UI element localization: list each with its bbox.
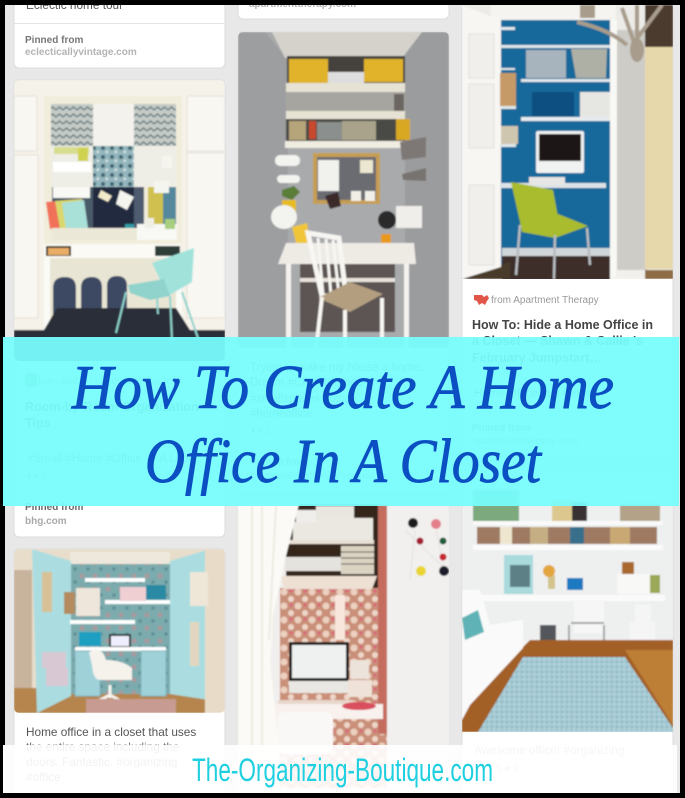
pin description: Trying to make my house a home: xyxy=(250,362,423,374)
panel: column 2 top card stub xyxy=(238,0,449,19)
pin description line 3: doors. Fantastic. #organizing xyxy=(26,755,177,769)
pin heading line 2: a Closet — Shawn & Callie 's xyxy=(472,334,643,348)
pin stats: ♦ ♦ 1 xyxy=(27,470,46,480)
panel: column 2 pink closet card xyxy=(238,504,449,794)
source icon xyxy=(474,295,489,305)
pin note: Home Office in a Closet xyxy=(474,388,596,400)
pin source: bhg.com xyxy=(25,516,67,527)
title line 1: How To Create A Home xyxy=(71,354,614,422)
pin description: Awesome office! #organizing xyxy=(474,743,624,757)
footer band with website xyxy=(3,745,677,793)
pin heading line 3: February Jumpstart… xyxy=(472,351,602,365)
panel: column 1 organization card xyxy=(14,80,225,537)
pinned from label: Pinned from xyxy=(25,35,83,46)
photo: turquoise closet with open doors xyxy=(14,549,225,713)
source line: from Better Homes and Gardens xyxy=(38,376,183,387)
panel: column 3 blue closet card xyxy=(462,5,674,364)
photo: blue closet with green chair xyxy=(462,5,673,280)
pin heading: How To: Hide a Home Office in xyxy=(472,318,653,332)
pinned from label: Pinned from xyxy=(25,502,83,513)
panel: column 2 grey closet card xyxy=(238,32,450,337)
photo: pink wallpaper closet with curtain xyxy=(238,504,449,794)
pin description line 3: #smallspaces #office xyxy=(250,393,357,405)
pin description line 2: Dream #Closet-turned- xyxy=(250,377,367,389)
pin tags: #Small #Home #Office — A Look xyxy=(27,453,195,465)
pin stats: 5 ♥ 9 xyxy=(496,764,519,775)
source line: from Apartment Therapy xyxy=(491,295,599,306)
pin description line 4: #office xyxy=(26,770,61,784)
pin heading: Room-by-Room Organization xyxy=(25,400,199,414)
pin description line 2: the entire space including the xyxy=(26,740,180,754)
pin description line 4: #homeoffice xyxy=(250,408,312,420)
title line 2: Office In A Closet xyxy=(145,428,543,496)
source icon xyxy=(25,373,37,387)
panel: column 1 top pin card xyxy=(14,0,225,68)
pin description: Home office in a closet that uses xyxy=(26,725,196,739)
pin source: homemakerdiary.blogspot.in xyxy=(250,471,386,482)
pin source: eclecticallyvintage.com xyxy=(25,47,137,58)
photo: white closet office with teal chair xyxy=(14,80,225,365)
panel: column 1 bottom closet card xyxy=(14,549,225,798)
pinned from label: Pinned from xyxy=(250,457,308,468)
panel: column 3 white office card xyxy=(462,502,674,745)
pin heading second line: Tips xyxy=(25,416,51,430)
photo: grey closet with yellow boxes xyxy=(238,32,449,350)
pin stats: ♦ ♦ 1 xyxy=(251,425,270,435)
website url: The-Organizing-Boutique.com xyxy=(192,752,493,788)
photo: white office with blue rug xyxy=(462,502,673,732)
pin source: apartmenttherapy.com xyxy=(472,436,579,447)
pinned from label: Pinned from xyxy=(472,423,530,434)
banner: title on cyan band xyxy=(3,337,679,506)
